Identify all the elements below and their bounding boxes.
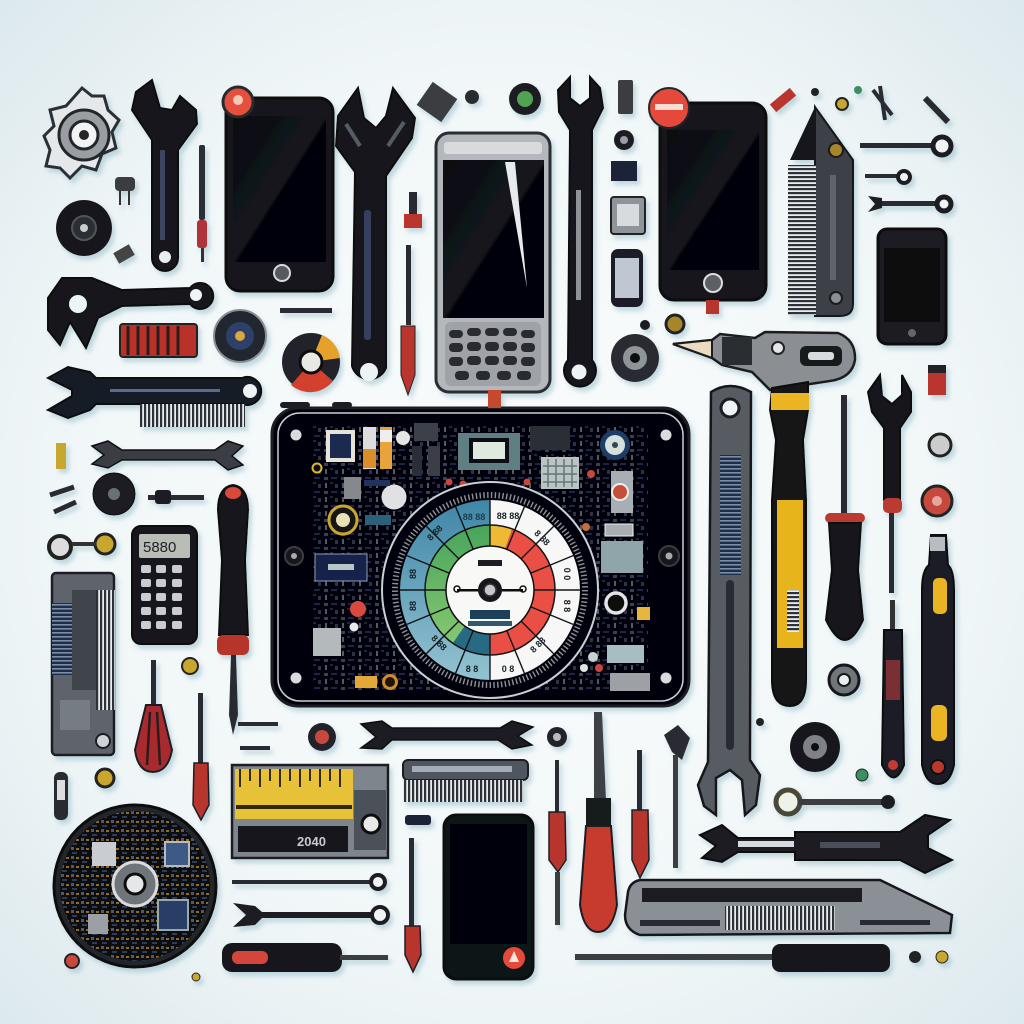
icon: ruler device: 2040 xyxy=(297,834,326,849)
phone: top left xyxy=(223,87,333,291)
icon: thin screwdriver bottom xyxy=(405,838,421,972)
gauge labels: 0 0 xyxy=(562,568,572,580)
icon: gear xyxy=(44,88,119,178)
icon: thin red screwdriver xyxy=(193,693,209,820)
icon: open end wrench xyxy=(558,77,603,387)
gauge labels: 8 8 xyxy=(562,600,572,612)
icon: right wrench with rod xyxy=(868,375,911,593)
icon: long wrench xyxy=(698,386,760,815)
icon: screwdriver black xyxy=(825,395,865,695)
device top connector xyxy=(280,390,501,408)
gauge labels: 88 xyxy=(408,569,418,579)
circuit board texture xyxy=(312,424,648,692)
icon: black and yellow tool right xyxy=(922,535,954,784)
icon: circuit disc xyxy=(54,805,216,967)
gauge labels: 88 88 xyxy=(497,511,519,521)
gauge labels: 0 8 xyxy=(502,664,514,674)
phone: keypad handset xyxy=(436,133,550,392)
icon: calculator: 5880 xyxy=(143,539,176,556)
icon: long screwdriver bottom xyxy=(575,944,890,972)
icon: gray module xyxy=(52,573,115,755)
panel: central circuit device xyxy=(272,408,689,706)
icon: calculator xyxy=(132,526,197,644)
icon: disc dark xyxy=(214,310,266,362)
gauge labels: 8 88 xyxy=(528,635,548,655)
icon: red screwdrivers xyxy=(549,712,649,932)
gauge labels: 8 8 xyxy=(466,664,478,674)
icon: big wrench lower right xyxy=(700,815,952,873)
icon: horizontal wrench with comb xyxy=(48,367,261,427)
gauge labels: 88 88 xyxy=(463,512,485,522)
icon: round knob xyxy=(93,473,204,515)
gauge labels: 8 88 xyxy=(532,528,552,548)
icon: hammer handle xyxy=(770,382,809,706)
icon: adjustable wrench top-left xyxy=(132,80,197,271)
icon: thin hook wrench xyxy=(664,725,690,868)
icon: hammer head xyxy=(673,332,855,390)
gauge wheel xyxy=(382,482,598,698)
icon: right side small wrenches xyxy=(860,137,951,212)
icon: small wrench lower right xyxy=(776,790,895,814)
phone: small right xyxy=(878,229,946,344)
icon: red handled screwdriver xyxy=(135,660,172,772)
icon: comb blade xyxy=(788,107,853,316)
device screws xyxy=(285,430,679,684)
icon: double wrench xyxy=(92,441,243,470)
icon: horizontal wrench center xyxy=(361,721,533,749)
phone: bottom xyxy=(444,815,533,979)
icon: bottom left wrenches xyxy=(232,875,388,927)
icon: long blade knife xyxy=(625,880,952,935)
icon: small screwdriver xyxy=(197,145,207,262)
icon: left wrench with jaw xyxy=(48,278,213,348)
icon: ruler device xyxy=(232,765,388,858)
icon: black screwdriver xyxy=(217,485,249,735)
phone: top right xyxy=(649,88,766,314)
gauge center face xyxy=(446,546,534,634)
icon: narrow tool xyxy=(882,600,904,778)
icon: red-black screwdriver horizontal xyxy=(222,943,388,972)
gauge outer segments xyxy=(400,500,580,680)
gauge labels xyxy=(408,511,572,674)
gauge labels: 8 88 xyxy=(429,633,449,653)
icon: large adjustable wrench xyxy=(336,88,415,381)
icon: disc lower right xyxy=(790,722,840,772)
gauge dividers xyxy=(400,500,580,680)
gauge labels: 8 88 xyxy=(425,523,445,543)
icon: red component xyxy=(120,324,197,357)
circuit components xyxy=(312,423,650,691)
gauge labels: 88 xyxy=(408,601,418,611)
icon: small comb xyxy=(403,760,528,802)
small scattered parts xyxy=(49,80,952,981)
icon: red disc xyxy=(282,333,340,392)
gauge middle segments xyxy=(425,525,555,655)
